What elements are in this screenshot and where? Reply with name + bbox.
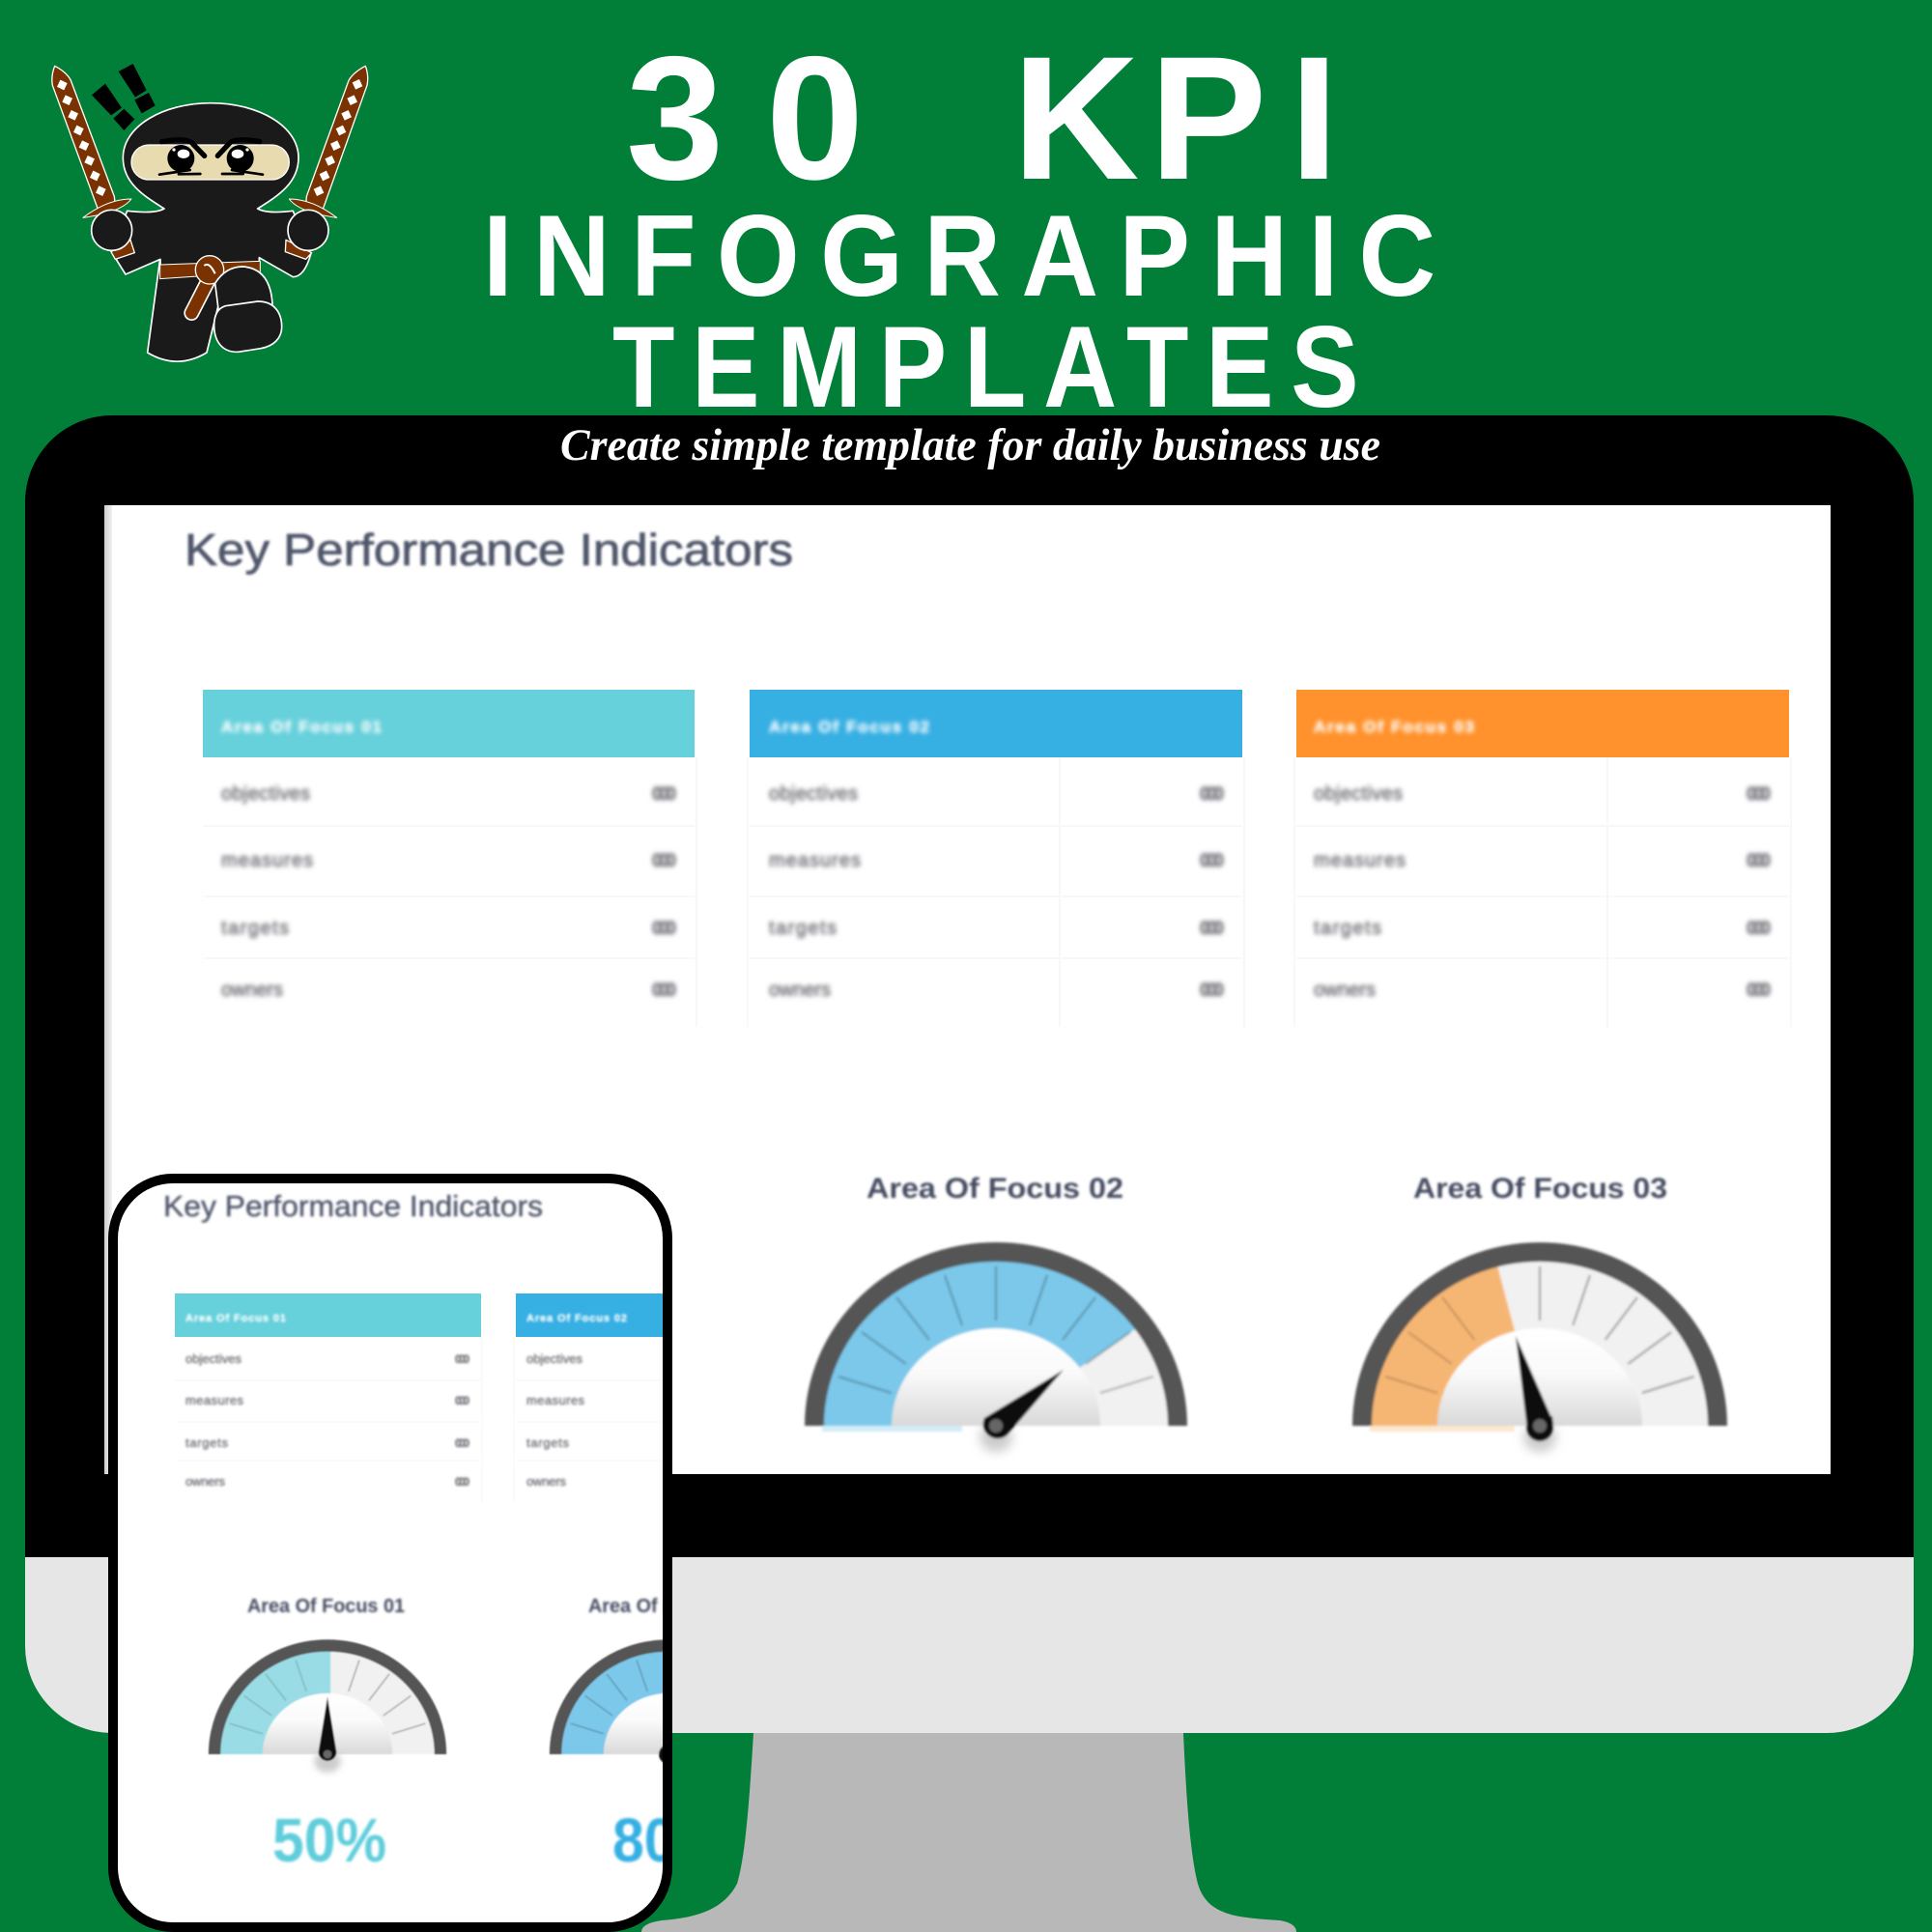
gauge heading 02: Area Of Focus 02	[867, 1173, 1123, 1205]
table 1	[203, 690, 696, 1027]
table 1 text: targets	[221, 918, 289, 939]
table 2 text	[769, 718, 1224, 1001]
table 1 text: measures	[221, 850, 313, 871]
table 2 grid	[748, 757, 1244, 1027]
gauge heading 03: Area Of Focus 03	[1413, 1173, 1667, 1205]
title line: INFOGRAPHIC: INFOGRAPHIC	[483, 192, 1435, 321]
screen left edge	[104, 505, 112, 1474]
ninja face band	[131, 145, 289, 180]
phone gauge 01	[209, 1639, 446, 1773]
ninja belt tail	[191, 256, 224, 313]
table 2 text: targets	[769, 918, 837, 939]
phone body	[113, 1179, 668, 1927]
ninja raised leg	[215, 267, 272, 314]
table 3 text: 000	[1747, 919, 1771, 939]
phone table 1: measures	[185, 1393, 243, 1407]
phone value 80%: 80%	[612, 1805, 726, 1875]
table 2 text: 000	[1200, 980, 1224, 1001]
phone table 2: targets	[526, 1435, 570, 1450]
phone table 1: 000	[455, 1352, 469, 1366]
phone gauge heading 01: Area Of Focus 01	[247, 1596, 405, 1617]
table 3 grid	[1294, 757, 1791, 1027]
table 1 text: 000	[652, 851, 676, 871]
table 2 text: 000	[1200, 784, 1224, 805]
table 2 text: 000	[1200, 919, 1224, 939]
icon: ninja mascot	[52, 64, 368, 361]
phone gauge 02	[549, 1638, 663, 1764]
monitor screen	[104, 505, 1831, 1474]
phone table 1: owners	[185, 1474, 226, 1489]
phone table 2	[516, 1293, 663, 1488]
table 2 text: owners	[769, 980, 831, 1001]
table 1 text: objectives	[221, 783, 310, 805]
table 2 header	[750, 690, 1242, 757]
title	[483, 19, 1435, 431]
table 2 text: measures	[769, 850, 861, 871]
gauge 02	[805, 1242, 1187, 1452]
gauge 03 rim	[1352, 1242, 1727, 1426]
table 3 text	[1314, 718, 1771, 1001]
ninja legs	[148, 259, 222, 361]
table 1 text: Area Of Focus 01	[221, 718, 382, 736]
table 3 text: measures	[1314, 850, 1406, 871]
table 1 text: owners	[221, 980, 283, 1001]
gauge 02 rim	[805, 1242, 1187, 1426]
gauge 02 base	[822, 1260, 1170, 1426]
subtitle: Create simple template for daily business use	[560, 420, 1380, 470]
phone table 2: owners	[526, 1474, 566, 1489]
ninja cuffs	[111, 240, 312, 259]
phone heading: Key Performance Indicators	[163, 1189, 543, 1223]
ninja foot	[214, 301, 282, 352]
gauge 02 hub disc	[892, 1328, 1100, 1426]
phone frame	[113, 1179, 668, 1927]
ninja body and head	[111, 103, 311, 277]
table 3 text: 000	[1747, 980, 1771, 1001]
table 2 text: 000	[1200, 851, 1224, 871]
monitor stand	[641, 1733, 1296, 1932]
phone table 2: measures	[526, 1393, 585, 1407]
gauge 03	[1352, 1242, 1727, 1452]
table 3 header	[1296, 690, 1789, 757]
phone table 1: Area Of Focus 01	[185, 1313, 286, 1324]
table 1 grid	[203, 757, 696, 1027]
phone table 1	[175, 1293, 482, 1502]
phone mockup	[108, 1174, 672, 1932]
ninja eyes	[159, 140, 263, 175]
phone table 2: Area Of Focus 02	[526, 1313, 627, 1324]
phone table 1: objectives	[185, 1351, 242, 1366]
ninja hands	[92, 210, 328, 250]
table 1 text: 000	[652, 980, 676, 1001]
phone value 50%: 50%	[272, 1805, 386, 1875]
phone table 1: targets	[185, 1435, 228, 1450]
phone table 1: 000	[455, 1475, 469, 1489]
sword left	[52, 66, 131, 217]
table 2 text: objectives	[769, 783, 858, 805]
phone table 1: 000	[455, 1394, 469, 1407]
table 3 text: owners	[1314, 980, 1376, 1001]
gauge 02 filled arc	[822, 1260, 1137, 1426]
monitor chin	[25, 1449, 1914, 1733]
exclamation marks	[92, 64, 156, 130]
phone gauge heading 02: Area Of Focus 02	[588, 1596, 746, 1617]
gauge 03 base	[1370, 1260, 1710, 1426]
phone table 2: objectives	[526, 1351, 583, 1366]
table 3 text: 000	[1747, 851, 1771, 871]
table 3 text: targets	[1314, 918, 1381, 939]
phone content	[163, 1189, 822, 1875]
table 1 text	[221, 718, 676, 1001]
screen heading: Key Performance Indicators	[185, 525, 793, 575]
gauge 03 needle	[1516, 1336, 1556, 1452]
gauge 03 filled arc	[1370, 1265, 1540, 1426]
table 3	[1294, 690, 1791, 1027]
table 3 text: 000	[1747, 784, 1771, 805]
gauge 03 hub disc	[1437, 1328, 1642, 1426]
gauge 02 needle	[980, 1370, 1064, 1452]
monitor bezel	[25, 415, 1914, 1557]
phone table 1: 000	[455, 1436, 469, 1450]
table 2	[748, 690, 1244, 1027]
monitor	[25, 415, 1914, 1733]
table 3 text: objectives	[1314, 783, 1403, 805]
table 1 header	[203, 690, 695, 757]
title line: TEMPLATES: TEMPLATES	[612, 302, 1359, 431]
table 1 text: 000	[652, 784, 676, 805]
ninja belt	[160, 261, 260, 279]
sword right	[289, 66, 368, 217]
table 2 text: Area Of Focus 02	[769, 718, 929, 736]
table 1 text: 000	[652, 919, 676, 939]
title line: 30 KPI: 30KPI	[626, 19, 1339, 216]
table 3 text: Area Of Focus 03	[1314, 718, 1474, 736]
